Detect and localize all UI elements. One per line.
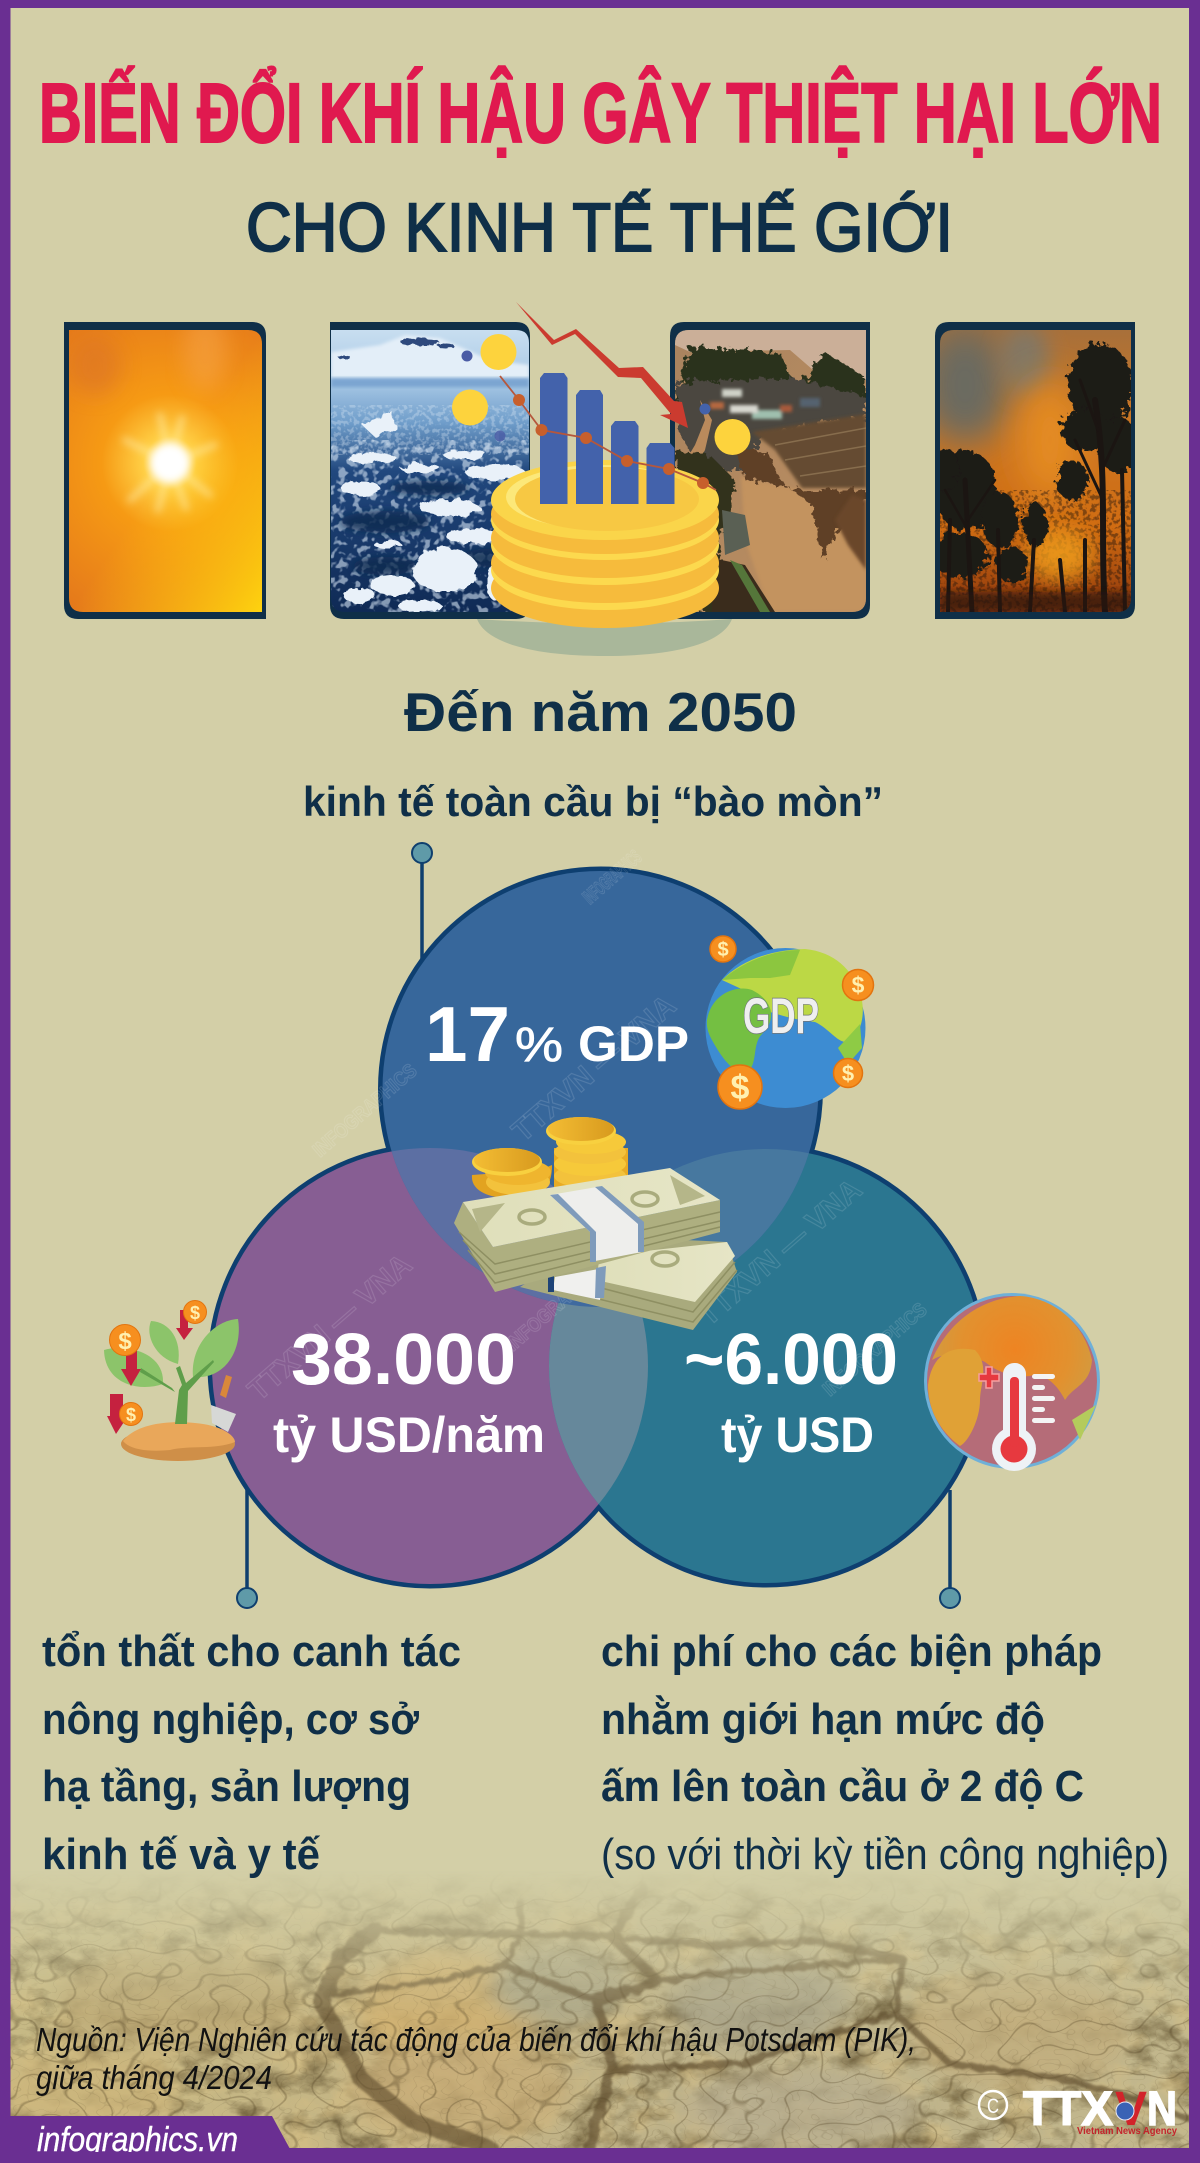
connector: top circle (412, 843, 432, 960)
dark water patches (340, 481, 520, 575)
orange coins (110, 1300, 206, 1426)
logo: TTXVN: Vietnam News Agency (1077, 2126, 1177, 2137)
icon: cash and coins (454, 1117, 737, 1330)
photo panel: forest fire (920, 322, 1138, 619)
lower banknote stack (520, 1236, 737, 1330)
source note: giữa tháng 4/2024 (36, 2059, 272, 2096)
logo: TTXVN: V (1115, 2083, 1147, 2136)
watermarks: TTXVN — VNA (242, 1248, 418, 1407)
logo: TTXVN (979, 2083, 1177, 2137)
bars (540, 373, 674, 504)
coin stack (491, 460, 719, 628)
icon: plant with falling coins: $ (190, 1303, 200, 1323)
leaves and stem (104, 1319, 239, 1387)
text block: left description: kinh tế và y tế (42, 1830, 320, 1879)
tree silhouettes (931, 343, 1138, 583)
figure: 17% GDP (425, 990, 689, 1078)
soil mound (121, 1427, 235, 1461)
text block: left description: tổn thất cho canh tác (42, 1627, 461, 1676)
figure: 6.000 (684, 1320, 898, 1463)
floating gold coins (452, 334, 750, 455)
logo: TTXVN: C (987, 2095, 999, 2118)
icon: plant with falling coins: $ (126, 1405, 136, 1425)
connector: right circle (940, 1490, 960, 1608)
shadow under coins (477, 619, 732, 656)
collapsed bank (735, 448, 866, 560)
photo panel: sun (64, 310, 266, 619)
red arrows (107, 1310, 193, 1434)
icon: warming globe with thermometer (924, 1293, 1100, 1471)
photo panel: melting ice (330, 322, 530, 619)
road (690, 400, 712, 454)
dark trees and slope (675, 450, 735, 612)
watermarks: TTXVN — VNA (692, 1173, 868, 1332)
text block: left description (42, 1627, 461, 1879)
bare earth (741, 477, 866, 612)
ice floes (340, 411, 525, 612)
icon: GDP globe: $ (852, 972, 865, 998)
mountain (331, 335, 529, 378)
heading: year: Đến năm 2050 (404, 681, 797, 743)
figure: 17% GDP: % (515, 1019, 563, 1072)
icon: GDP globe: $ (731, 1069, 750, 1107)
source note (36, 2021, 916, 2096)
farm field (752, 414, 866, 488)
watermarks: TTXVN — VNA (506, 989, 682, 1148)
watermarks: INFOGRAPHICS (819, 1299, 931, 1401)
watermarks (242, 846, 931, 1407)
icon: GDP globe (706, 936, 874, 1109)
logo: TTXVN: N (1147, 2083, 1177, 2136)
icon: GDP globe: $ (717, 939, 729, 961)
village (678, 378, 866, 470)
chart illustration: falling bars on coin stack (452, 302, 750, 656)
gold coin stack right (546, 1117, 628, 1195)
figure: 38.000: tỷ USD/năm (273, 1407, 545, 1463)
watermarks: INFOGRAPHICS (309, 1060, 421, 1162)
figure: 6.000: ~6.000 (684, 1320, 898, 1400)
text block: right description: ấm lên toàn cầu ở 2 độ C (601, 1762, 1084, 1811)
venn diagram circles (210, 869, 985, 1586)
watermarks: INFOGRAPHICS (502, 1254, 614, 1356)
text block: right description: chi phí cho các biện pháp (601, 1627, 1102, 1676)
trend line with dots (500, 376, 716, 490)
subheading: kinh tế toàn cầu bị “bào mòn” (303, 778, 883, 825)
icon: plant with falling coins: $ (118, 1328, 132, 1355)
source note: Nguồn: Viện Nghiên cứu tác động của biến đổi khí hậu Potsdam (PIK), (36, 2021, 916, 2058)
figure: 38.000: 38.000 (291, 1320, 516, 1400)
watermarks: INFOGRAPHICS (579, 846, 646, 909)
connector: left circle (237, 1480, 257, 1608)
figure: 38.000 (273, 1320, 545, 1463)
figure: 17% GDP: 17 (425, 990, 510, 1078)
website tab: infographics.vn (37, 2121, 238, 2159)
text block: right description (601, 1627, 1169, 1879)
cracked earth background photo (10, 1882, 1189, 2148)
thermometer (992, 1363, 1036, 1471)
icon label: GDP: GDP (743, 988, 819, 1044)
trowel (211, 1405, 236, 1432)
text block: left description: hạ tầng, sản lượng (42, 1762, 411, 1811)
icon: plant with falling coins (104, 1300, 239, 1461)
icon: GDP globe: $ (842, 1061, 854, 1086)
flood water (675, 330, 866, 380)
ice fragments speckle (331, 440, 529, 612)
text block: left description: nông nghiệp, cơ sở (42, 1695, 420, 1744)
tree belt (675, 344, 866, 402)
photo panel: flood (670, 322, 870, 619)
text block: right description: nhằm giới hạn mức độ (601, 1694, 1045, 1744)
falling red arrow (516, 302, 688, 428)
figure: 6.000: tỷ USD (721, 1407, 874, 1463)
website tab (10, 2116, 290, 2152)
dark undergrowth (940, 490, 1131, 612)
title line 2: CHO KINH TẾ THẾ GIỚI (246, 189, 953, 266)
upper banknote stack (454, 1168, 720, 1292)
logo: TTXVN: TTX (1023, 2083, 1113, 2136)
figure: 17% GDP: GDP (578, 1016, 689, 1072)
gold coin stack left (472, 1148, 552, 1198)
